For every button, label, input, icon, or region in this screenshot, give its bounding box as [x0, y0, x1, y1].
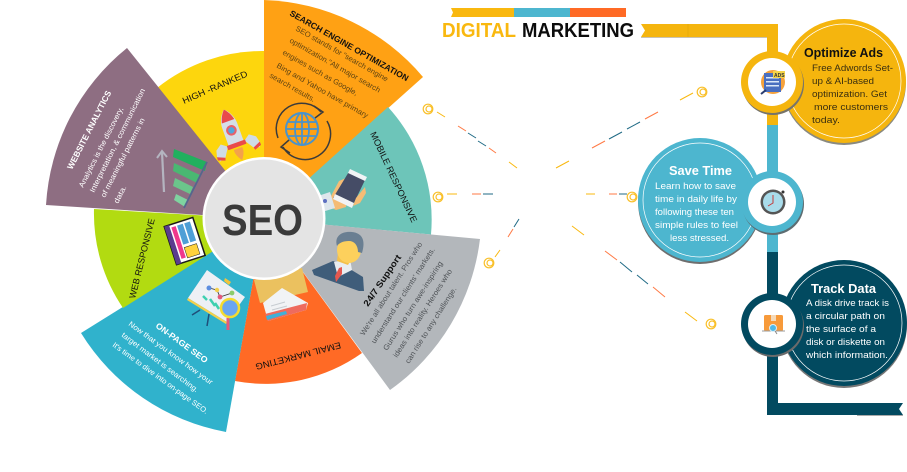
panel: optimize ads: up & AI-based — [812, 76, 874, 87]
dashed connector lines — [423, 87, 716, 329]
panel: track data — [781, 260, 907, 388]
panel: search engine optimization: SEARCH ENGINE OPTIMIZATION — [288, 8, 410, 83]
panel: 24/7 support: understand our clients' markets. — [369, 246, 437, 345]
icon: rocket — [202, 102, 264, 168]
icon: envelope — [254, 268, 308, 321]
panel: website analytics: Analytics is the discovery, — [77, 106, 125, 189]
panel: track data: disk or diskette on — [806, 337, 885, 348]
panel: save time: following these ten — [655, 207, 734, 218]
panel: optimize ads: Optimize Ads — [804, 45, 883, 60]
panel: save time: time in daily life by — [655, 194, 737, 205]
title: MARKETING — [522, 20, 634, 42]
title — [442, 8, 634, 42]
panel: 24/7 support: We're all about talent. Pros who — [358, 240, 424, 337]
connector end rings — [423, 87, 716, 329]
panel: website analytics: WEBSITE ANALYTICS — [65, 89, 113, 171]
panel: mobile responsive — [264, 107, 432, 234]
icon: web layout — [164, 217, 205, 265]
panel: 24/7 support: can rise to any challenge. — [403, 285, 459, 365]
panel: high-ranked: HIGH -RANKED — [181, 69, 249, 106]
panel: on-page SEO — [81, 219, 264, 432]
panel: web responsive — [94, 209, 264, 308]
panel: search engine optimization: engines such as Google, — [281, 48, 359, 98]
panel: save time: less stressed. — [670, 233, 729, 244]
center SEO circle: SEO — [222, 196, 303, 245]
title: DIGITAL — [442, 20, 516, 42]
panel: website analytics — [46, 48, 264, 219]
panel: optimize ads — [782, 19, 906, 145]
panel: 24/7 support: Gurus who turn awe-inspiring — [381, 260, 445, 352]
panel: mobile responsive: MOBILE RESPONSIVE — [368, 130, 419, 224]
panel: search engine optimization: SEO stands for "search engine — [294, 24, 390, 83]
node: clock icon — [741, 171, 804, 235]
panel: website analytics: Interpretation, & communication — [88, 87, 147, 194]
panel: web responsive: WEB RESPONSIVE — [127, 218, 157, 299]
panel: save time — [638, 138, 762, 264]
panel: track data: which information. — [805, 350, 888, 361]
icon: businessman — [312, 232, 364, 291]
panel: optimize ads: more customers — [814, 102, 888, 113]
panel: email marketing — [235, 219, 362, 384]
panel: search engine optimization: search results. — [268, 71, 317, 104]
icon: analysis board — [187, 270, 245, 330]
panel: search engine optimization: optimization."All major search — [288, 36, 382, 94]
panel: save time: simple rules to feel — [655, 220, 738, 231]
node: box icon — [741, 293, 804, 357]
panel: 24/7 support: ideas into reality. Heroes who — [391, 267, 454, 359]
panel: 24/7 support: 24/7 Support — [361, 253, 403, 308]
panel: email marketing: EMAIL MARKETING — [254, 340, 342, 372]
panel: optimize ads: Free Adwords Set- — [812, 63, 893, 74]
panel: track data: A disk drive track is — [806, 298, 889, 309]
SEO wheel — [46, 0, 480, 432]
panel: on-page SEO: It's time to dive into on-page SEO. — [111, 340, 210, 416]
panel: on-page SEO: target market is searching. — [120, 330, 200, 394]
node: optimize ads icon: ADS — [774, 73, 785, 79]
center SEO circle — [202, 157, 326, 280]
node: optimize ads icon — [741, 51, 804, 115]
panel: on-page SEO: ON-PAGE SEO — [154, 321, 210, 365]
panel: search engine optimization: Bing and Yahoo have primary — [275, 61, 370, 120]
panel: on-page SEO: Now that you know how your — [127, 319, 215, 387]
panel: track data: Track Data — [811, 281, 877, 296]
icon: growth chart — [157, 149, 207, 208]
panel: optimize ads: today. — [812, 115, 840, 126]
panel: 24/7 support — [264, 219, 480, 390]
panel: search engine optimization — [264, 0, 423, 219]
panel: track data: the surface of a — [806, 324, 877, 335]
panel: optimize ads: optimization. Get — [812, 89, 887, 100]
timeline stem — [641, 24, 903, 416]
icon: phone in hand — [318, 169, 367, 212]
icon: globe with arrows — [276, 103, 331, 160]
panel: track data: a circular path on — [806, 311, 885, 322]
panel: high-ranked — [157, 51, 264, 219]
panel: save time: Learn how to save — [655, 181, 736, 192]
title ribbon — [451, 8, 626, 17]
panel: website analytics: of meaningful patterns in — [99, 116, 147, 199]
panel: website analytics: data. — [112, 184, 128, 205]
panel: save time: Save Time — [669, 163, 732, 178]
